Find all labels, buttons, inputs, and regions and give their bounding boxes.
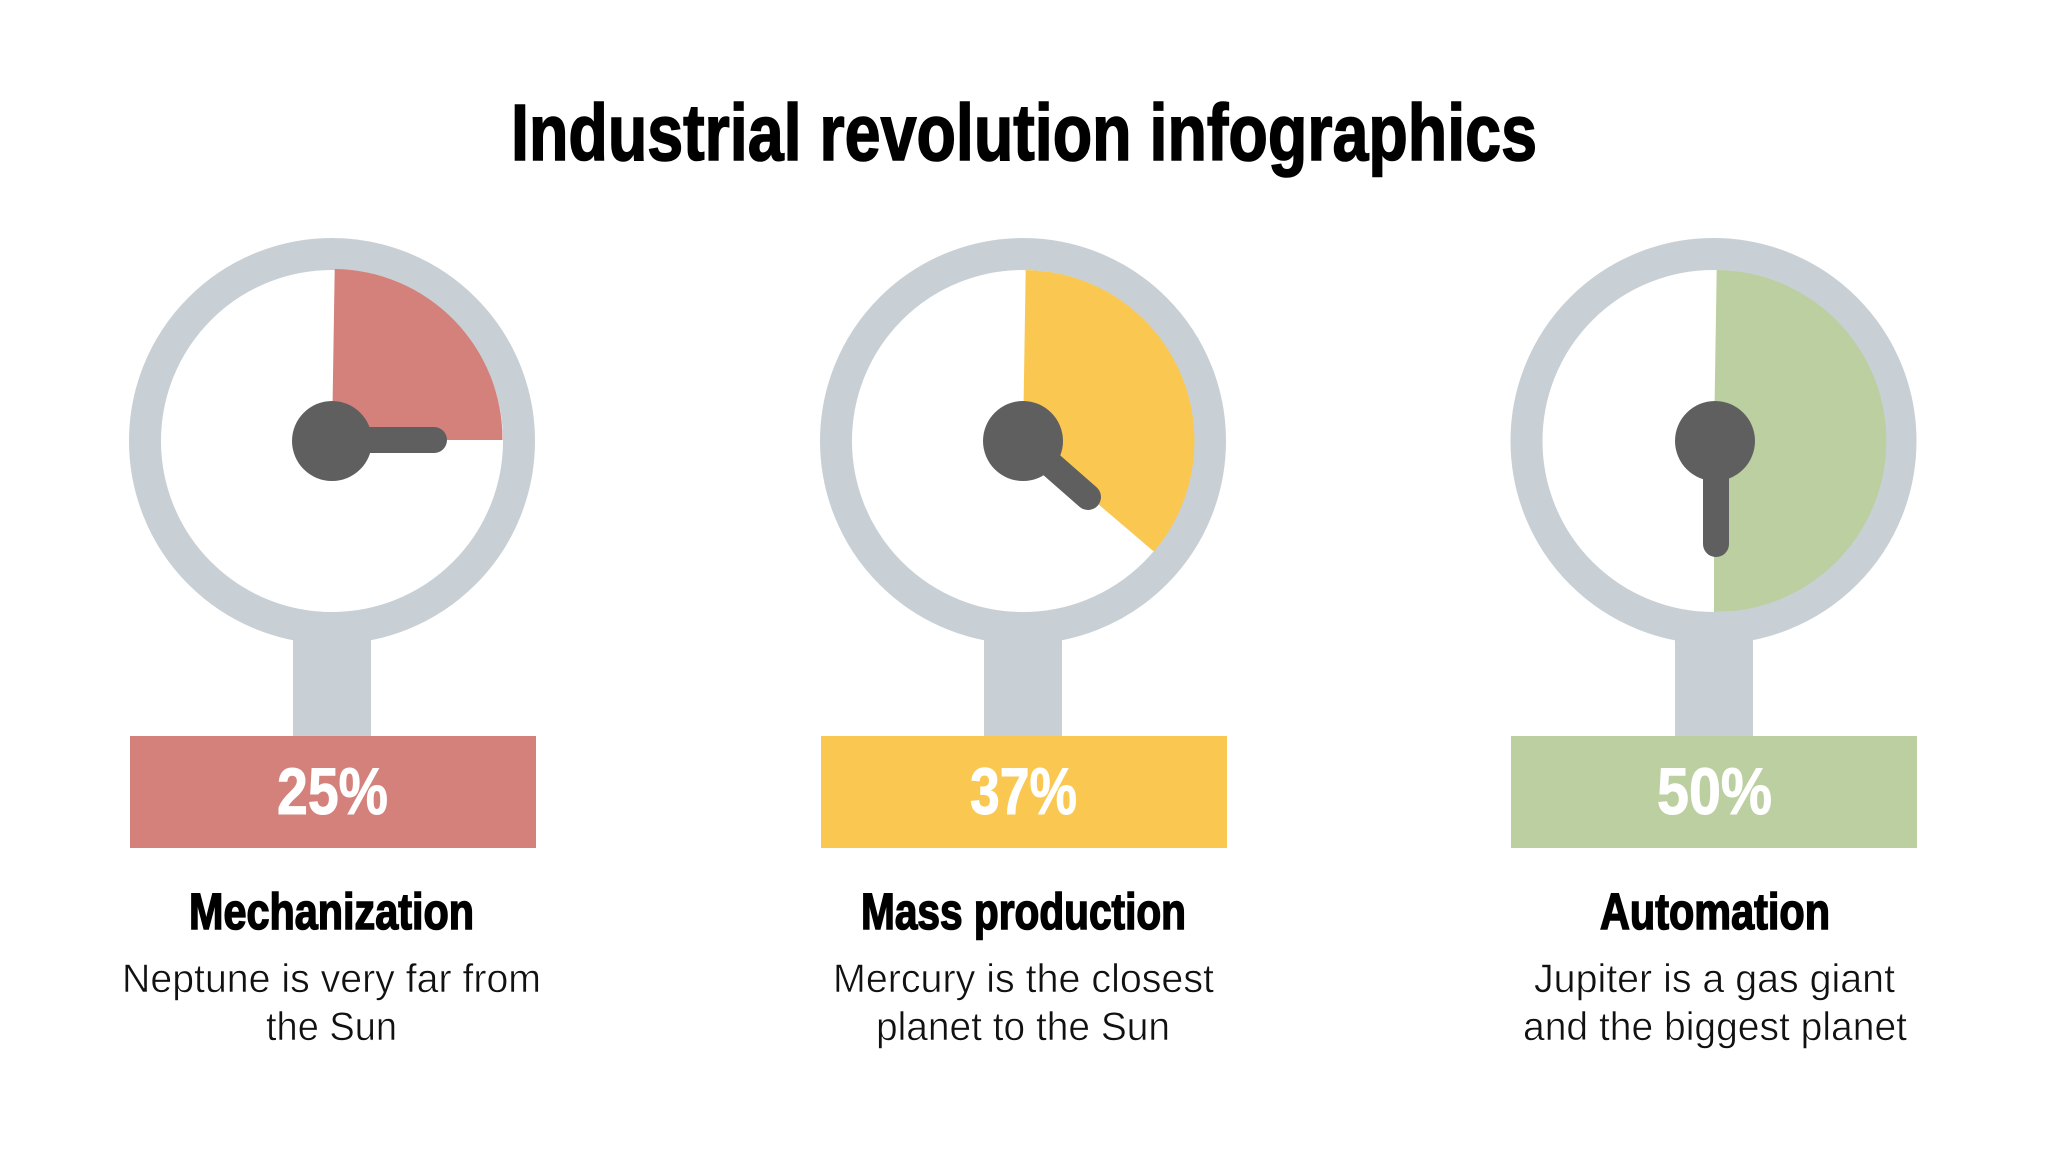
description: Automation: and the biggest planet: [1523, 1005, 1907, 1049]
description: Mass production: planet to the Sun: [876, 1005, 1170, 1049]
panel: automation: [1511, 254, 1917, 1049]
gauge: 37%: [836, 254, 1210, 740]
description: Automation: Jupiter is a gas giant: [1534, 957, 1895, 1001]
value bar: 37%: [821, 736, 1227, 848]
gauge: 50%: [1526, 254, 1900, 740]
heading: Automation: Automation: [1600, 883, 1830, 940]
value bar: 25%: [130, 736, 536, 848]
title: Industrial revolution infographics: [511, 88, 1537, 177]
description: Mass production: [833, 957, 1214, 1049]
description: Mechanization: [122, 957, 541, 1049]
description: Mass production: Mercury is the closest: [833, 957, 1214, 1001]
gauge: 25%: [145, 254, 519, 740]
panel: mechanization: [122, 254, 541, 1049]
heading: Mechanization: Mechanization: [189, 883, 474, 940]
value bar: 50%: [1511, 736, 1917, 848]
value bar: 25%: 25%: [277, 754, 388, 828]
description: Mechanization: Neptune is very far from: [122, 957, 541, 1001]
value bar: 50%: 50%: [1657, 754, 1772, 828]
description: Automation: [1523, 957, 1907, 1049]
panel: mass production: [821, 254, 1227, 1049]
description: Mechanization: the Sun: [266, 1005, 397, 1049]
heading: Mass production: Mass production: [861, 883, 1186, 940]
value bar: 37%: 37%: [970, 754, 1077, 828]
